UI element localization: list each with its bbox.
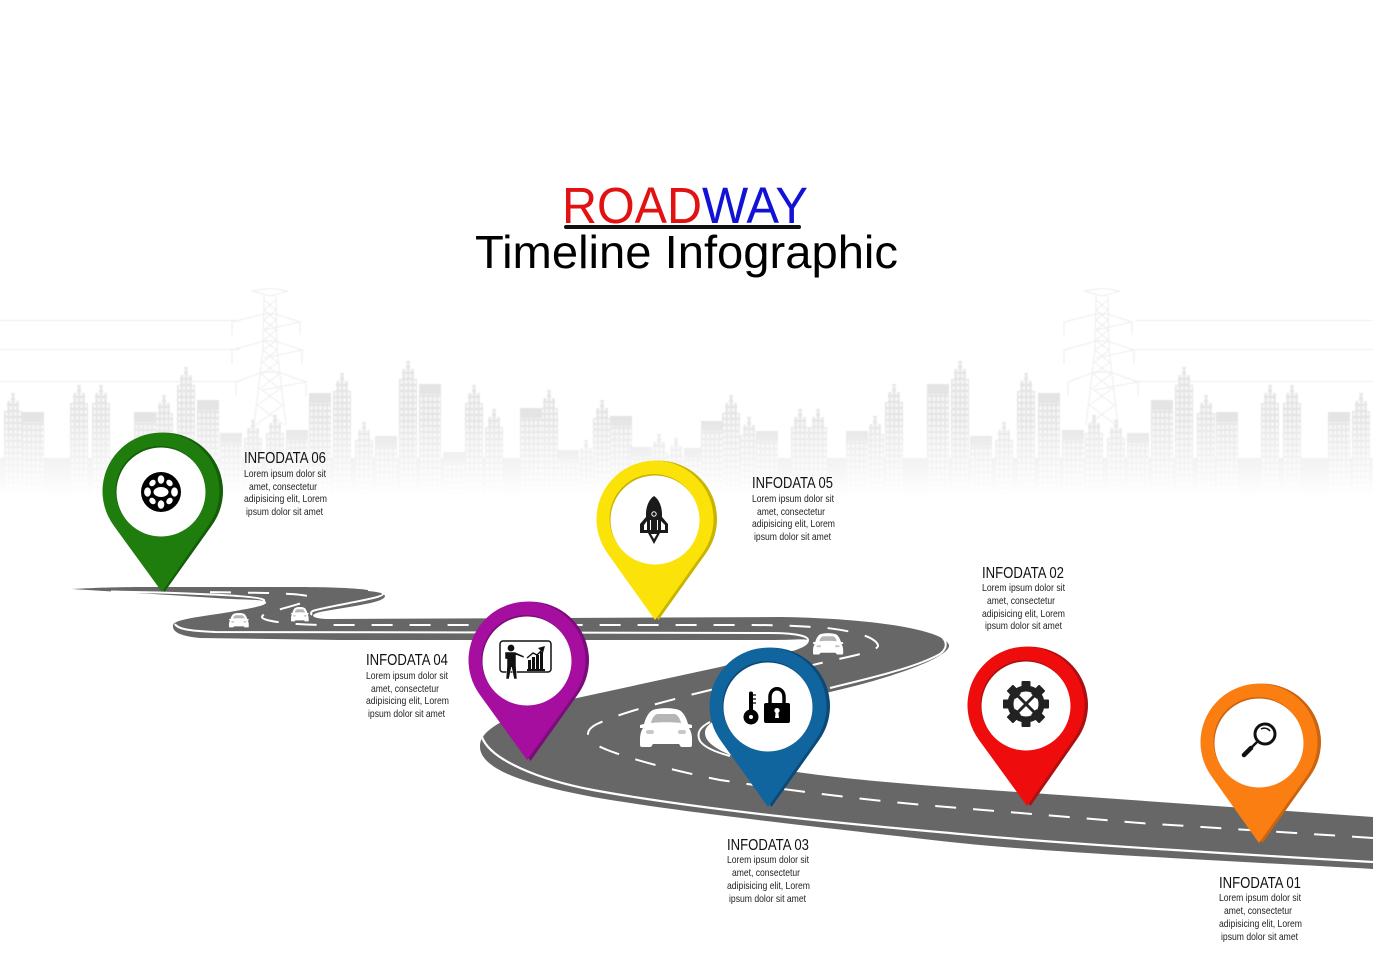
text: infodata 06: adipisicing elit, Lorem — [244, 493, 327, 505]
text: infodata 04: amet, consectetur — [371, 683, 439, 695]
text: infodata 03: ipsum dolor sit amet — [729, 893, 806, 905]
pin 04 purple — [468, 602, 589, 761]
text: infodata 02: Lorem ipsum dolor sit — [982, 582, 1065, 594]
title: WAY — [702, 177, 808, 234]
text: infodata 01: ipsum dolor sit amet — [1221, 931, 1298, 943]
winding road — [72, 587, 1373, 869]
icon: magnifier — [1244, 724, 1275, 755]
text: infodata 03: amet, consectetur — [732, 867, 800, 879]
text: infodata 02 — [982, 565, 1065, 632]
text: infodata 03: Lorem ipsum dolor sit — [727, 854, 809, 866]
text: infodata 06 — [244, 450, 327, 518]
text: infodata 05 — [752, 475, 835, 543]
car: middle — [813, 633, 843, 654]
pin 01 orange — [1200, 684, 1321, 843]
text: infodata 01: Lorem ipsum dolor sit — [1219, 892, 1301, 904]
text: infodata 05: adipisicing elit, Lorem — [752, 518, 835, 530]
car: large — [640, 708, 692, 747]
background: city skyline and power lines — [0, 288, 1373, 627]
car: small right — [291, 607, 309, 621]
text: infodata 03: adipisicing elit, Lorem — [727, 880, 810, 892]
text: infodata 06: ipsum dolor sit amet — [246, 506, 323, 518]
icon: gear and wrenches — [1003, 681, 1049, 727]
icon: film reel — [141, 472, 181, 512]
text: infodata 01: amet, consectetur — [1224, 905, 1292, 917]
text: infodata 05: Lorem ipsum dolor sit — [752, 493, 834, 505]
text: infodata 05: INFODATA 05 — [752, 475, 833, 492]
text: infodata 05: amet, consectetur — [757, 506, 825, 518]
car: small left — [229, 613, 249, 627]
icon: presenter with chart — [500, 641, 551, 679]
title — [475, 177, 898, 278]
text: infodata 04: INFODATA 04 — [366, 652, 448, 669]
text: infodata 01 — [1219, 875, 1302, 943]
text: infodata 06: amet, consectetur — [249, 481, 317, 493]
text: infodata 02: amet, consectetur — [987, 595, 1055, 607]
title: Timeline Infographic — [475, 226, 898, 278]
text: infodata 03: INFODATA 03 — [727, 837, 809, 854]
text: infodata 01: adipisicing elit, Lorem — [1219, 918, 1302, 930]
text: infodata 05: ipsum dolor sit amet — [754, 531, 831, 543]
pin 02 red — [968, 647, 1088, 806]
text: infodata 02: adipisicing elit, Lorem — [982, 608, 1065, 620]
icon: key and padlock — [744, 689, 790, 724]
text: infodata 04: ipsum dolor sit amet — [368, 708, 445, 720]
text: infodata 03 — [727, 837, 810, 905]
text: infodata 02: ipsum dolor sit amet — [985, 620, 1062, 632]
text: infodata 04: Lorem ipsum dolor sit — [366, 670, 448, 682]
icon: rocket — [640, 496, 668, 544]
text: infodata 04 — [366, 652, 449, 720]
text: infodata 04: adipisicing elit, Lorem — [366, 695, 449, 707]
pin 03 blue — [710, 648, 830, 807]
text: infodata 06: Lorem ipsum dolor sit — [244, 468, 326, 480]
pin 05 yellow — [596, 461, 717, 620]
text: infodata 01: INFODATA 01 — [1219, 875, 1301, 892]
text: infodata 06: INFODATA 06 — [244, 450, 326, 467]
text: infodata 02: INFODATA 02 — [982, 565, 1064, 582]
title: ROAD — [562, 177, 702, 234]
pin 06 green — [102, 433, 223, 592]
